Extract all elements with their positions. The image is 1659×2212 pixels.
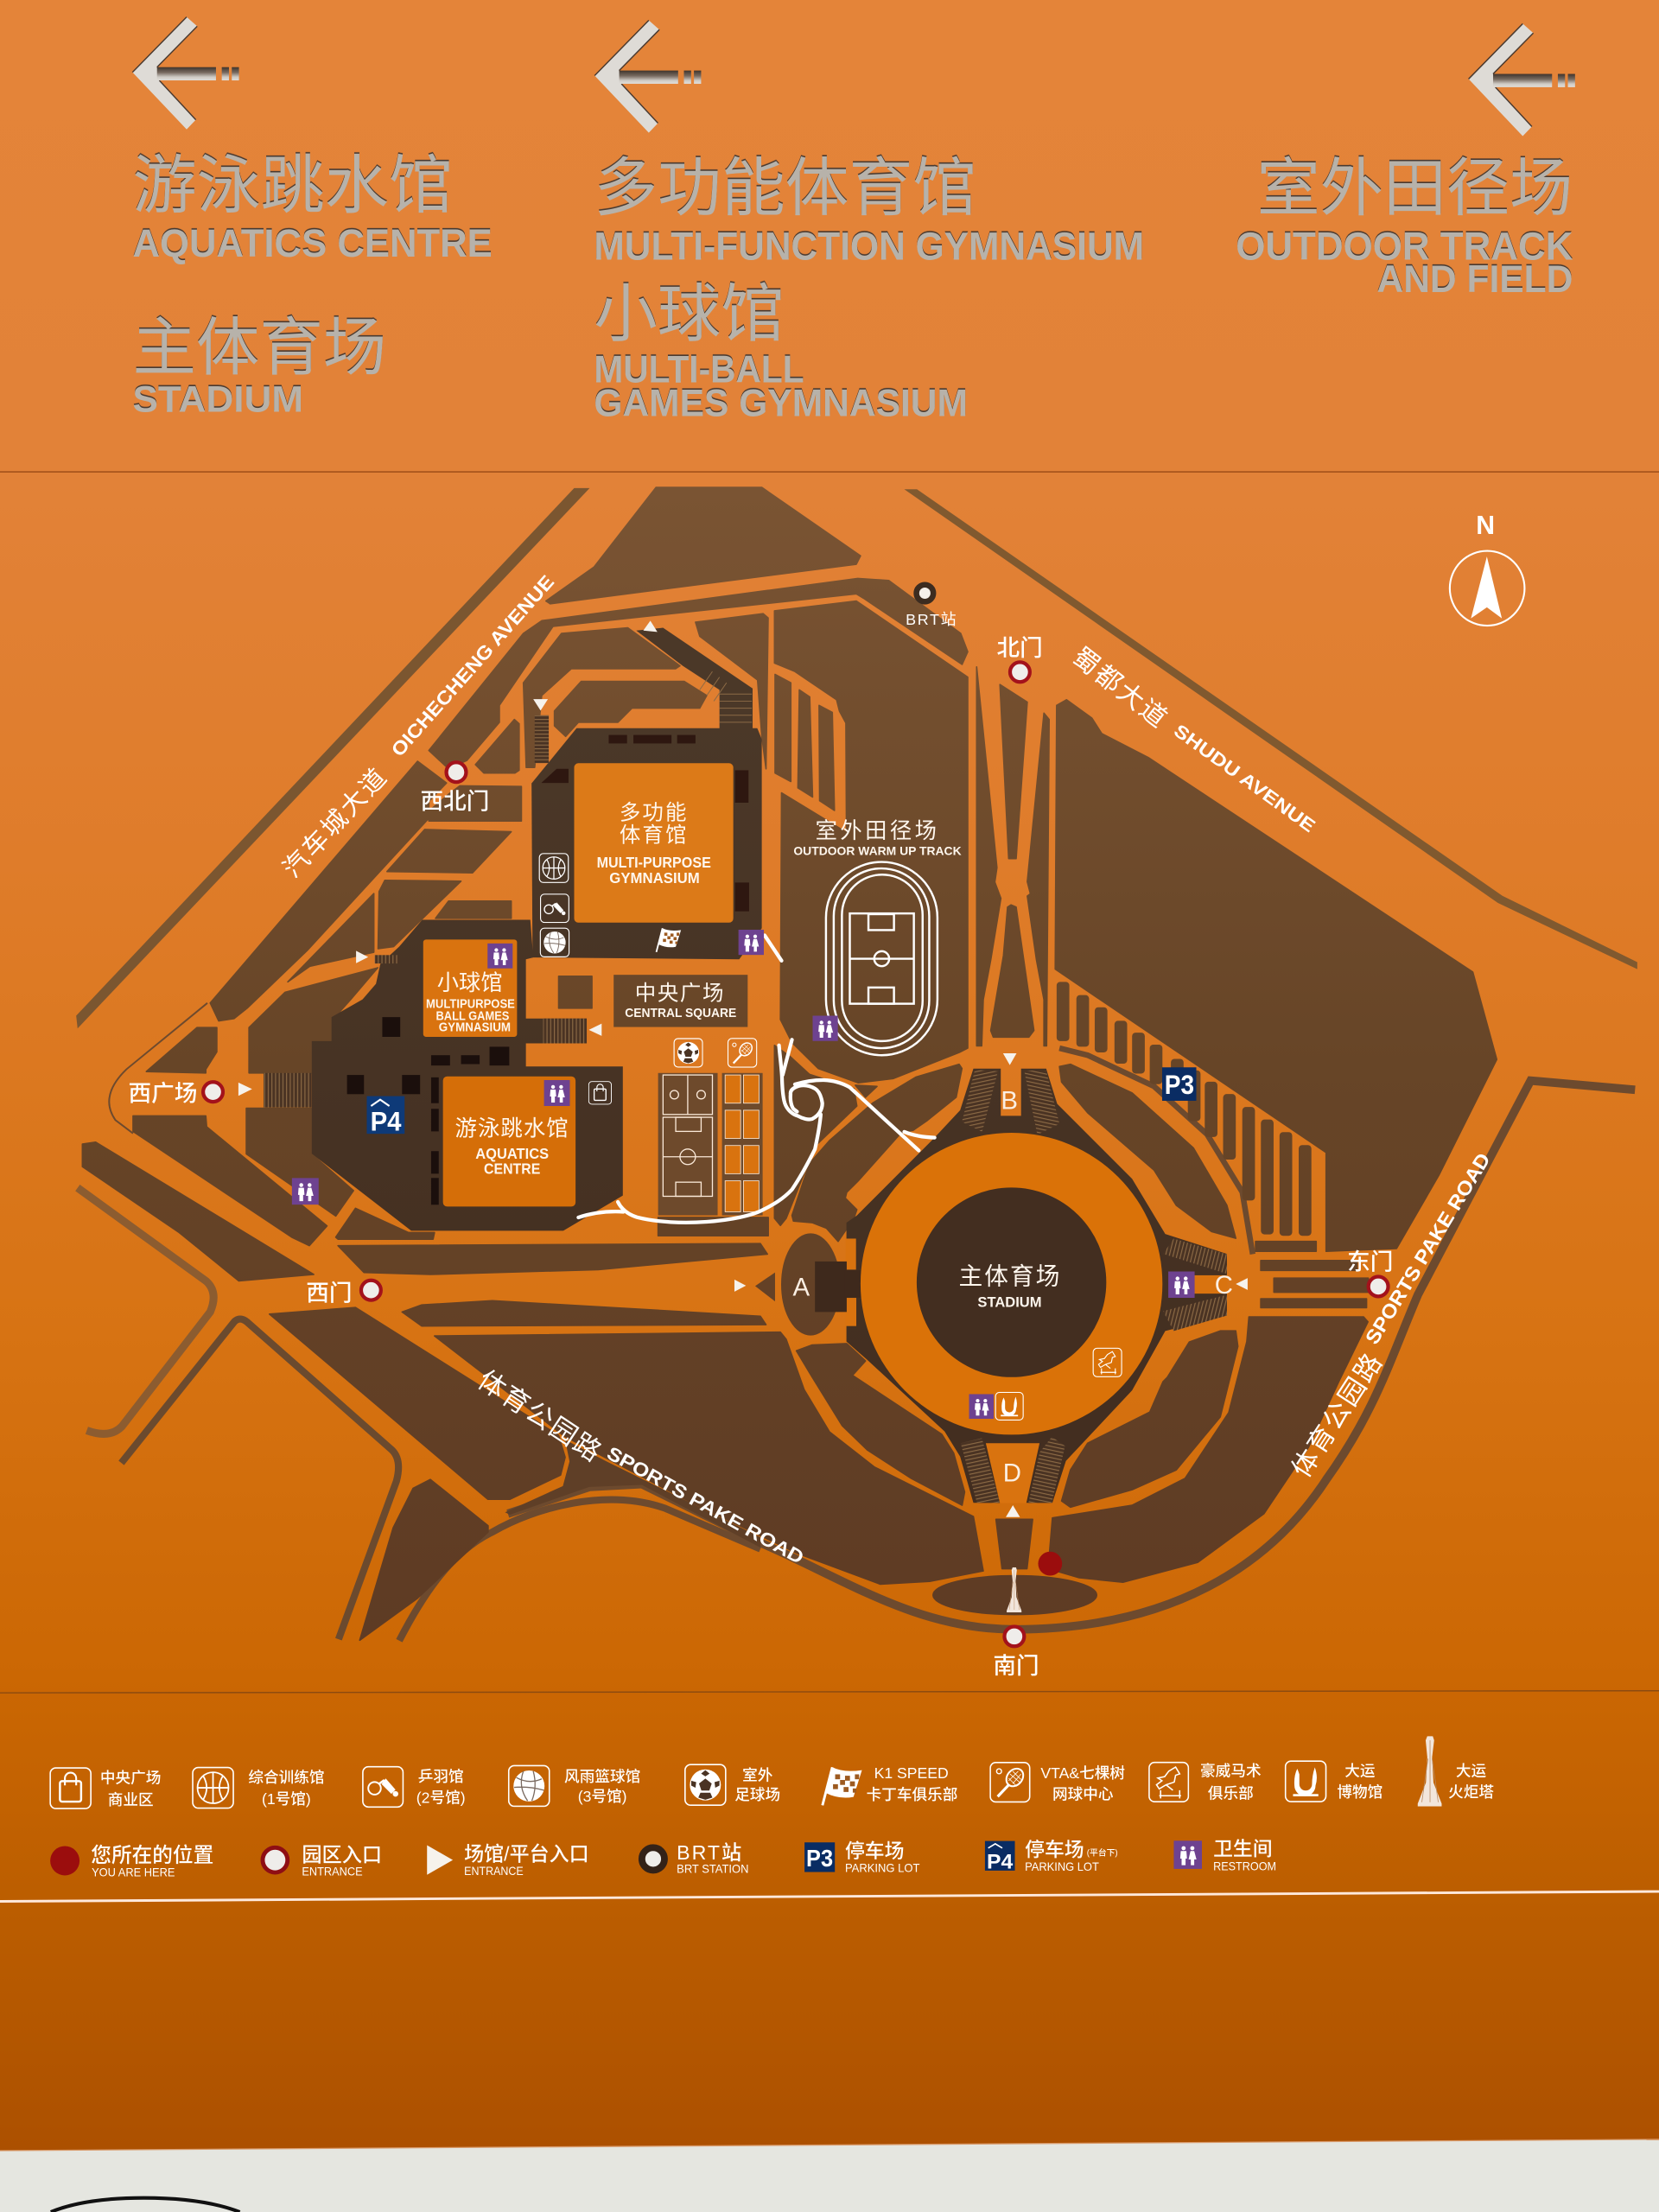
stadium gate letters: A xyxy=(793,1274,810,1302)
icon: shopping bag xyxy=(588,1082,612,1104)
entrance labels: 西广场 xyxy=(129,1080,197,1106)
legend: P3 parking: P3 xyxy=(806,1845,833,1872)
road label: Sports Park Road east en: SPORTS PAKE ROAD xyxy=(1361,1149,1495,1348)
legend: tennis centre: 网球中心 xyxy=(1052,1785,1114,1802)
legend: P4 parking xyxy=(985,1839,1118,1873)
entrance labels: 东门 xyxy=(1347,1249,1393,1274)
heading: stadium: STADIUM xyxy=(132,379,303,420)
label: multi-ball gymnasium: MULTIPURPOSE xyxy=(426,998,515,1012)
heading: aquatics centre: AQUATICS CENTRE xyxy=(132,221,493,265)
entrance labels: 南门 xyxy=(993,1653,1039,1679)
arrow: left to outdoor track xyxy=(1469,23,1575,137)
legend: outdoor soccer: 室外 xyxy=(742,1766,773,1783)
running track xyxy=(826,862,938,1055)
legend: all-weather basketball hall xyxy=(509,1765,640,1806)
label: multi-ball gymnasium: GYMNASIUM xyxy=(439,1020,511,1034)
icon: tennis xyxy=(728,1039,757,1067)
legend: park entrance: 园区入口 xyxy=(302,1843,382,1866)
panel: directional header xyxy=(132,17,1575,425)
heading: stadium: 主体育场 xyxy=(132,312,386,384)
building: multi-function gymnasium xyxy=(574,763,734,923)
heading: multi-function gymnasium: MULTI-FUNCTION GYMNASIUM xyxy=(594,224,1144,268)
arrow: left to aquatics and stadium xyxy=(132,17,239,130)
legend: all-weather basketball hall: 风雨篮球馆 xyxy=(564,1768,640,1785)
legend: P3 parking: 停车场 xyxy=(845,1840,905,1862)
legend: universiade torch tower: 大运 xyxy=(1456,1763,1487,1780)
aquatics and multi-ball building base xyxy=(264,919,623,1230)
legend: training hall xyxy=(193,1768,324,1808)
legend: equestrian club: 豪威马术 xyxy=(1200,1763,1262,1780)
road edge lines xyxy=(76,488,1637,1641)
icon: rain basketball hall xyxy=(540,928,569,957)
legend: P3 parking: PARKING LOT xyxy=(845,1861,920,1875)
legend: BRT station: BRT站 xyxy=(677,1841,743,1864)
icon: restroom multi-ball xyxy=(487,944,512,969)
ground blocks xyxy=(82,487,1497,1640)
entrance markers xyxy=(203,662,1389,1646)
road labels xyxy=(277,571,1495,1568)
legend: tennis centre xyxy=(990,1763,1125,1802)
legend: outdoor soccer: 足球场 xyxy=(734,1786,780,1803)
heading: outdoor track and field: AND FIELD xyxy=(1376,258,1573,301)
label: outdoor track: OUTDOOR WARM UP TRACK xyxy=(793,843,962,857)
label: multi-function gymnasium: 多功能 xyxy=(620,801,689,825)
legend: training hall: 综合训练馆 xyxy=(248,1769,324,1786)
icon: north compass: N xyxy=(1476,512,1495,540)
icon: restroom west xyxy=(292,1178,319,1205)
heading: aquatics centre: 游泳跳水馆 xyxy=(132,149,453,221)
icon: restroom track xyxy=(812,1016,838,1041)
label: BRT station: BRT站 xyxy=(906,611,957,628)
entrance labels: 西北门 xyxy=(421,788,489,814)
legend: universiade museum xyxy=(1286,1761,1382,1802)
legend: table tennis and badminton hall: (2号馆) xyxy=(416,1789,466,1807)
legend: P3 parking xyxy=(804,1840,920,1875)
label: central square: 中央广场 xyxy=(635,982,725,1006)
legend: you are here: YOU ARE HERE xyxy=(92,1865,175,1878)
icon: P4 parking: P4 xyxy=(371,1106,402,1137)
legend: universiade torch tower: 火炬塔 xyxy=(1448,1783,1494,1801)
stadium platform xyxy=(815,1069,1227,1503)
legend: universiade torch tower xyxy=(1418,1736,1494,1807)
label: stadium xyxy=(959,1263,1061,1310)
label: multi-function gymnasium: GYMNASIUM xyxy=(609,869,700,887)
icon: P3 parking: P3 xyxy=(1165,1070,1194,1100)
road label: Sports Park Road south en: SPORTS PAKE ROAD xyxy=(603,1442,807,1568)
entrance labels: 北门 xyxy=(996,635,1043,661)
heading: aquatics centre xyxy=(132,149,493,265)
icon: basketball hall xyxy=(539,854,569,882)
legend: equestrian club xyxy=(1149,1763,1262,1802)
building: multi-ball gymnasium xyxy=(423,939,517,1037)
road label: Qichecheng Avenue en: OICHECHENG AVENUE xyxy=(387,571,558,760)
icon: restroom east stadium xyxy=(1168,1272,1195,1298)
stadium gate letters: D xyxy=(1003,1459,1021,1487)
heading: multi-ball games gymnasium: 小球馆 xyxy=(594,278,785,350)
legend: training hall: (1号馆) xyxy=(262,1790,311,1808)
legend: karting club xyxy=(823,1764,957,1805)
stadium gate letters: B xyxy=(1001,1087,1018,1116)
road label: Sports Park Road south cn: 体育公园路 xyxy=(473,1364,608,1468)
label: aquatics centre: 游泳跳水馆 xyxy=(455,1116,569,1141)
label: outdoor track: 室外田径场 xyxy=(816,819,939,843)
legend: shopping area: 商业区 xyxy=(108,1791,154,1808)
legend: you are here: 您所在的位置 xyxy=(91,1844,213,1867)
icon: torch tower xyxy=(1007,1567,1021,1612)
legend: park entrance xyxy=(263,1843,382,1878)
heading: multi-ball games gymnasium xyxy=(594,278,968,425)
label: central square xyxy=(625,982,737,1020)
entrance labels: 西门 xyxy=(306,1280,353,1306)
legend: table tennis and badminton hall xyxy=(363,1767,466,1807)
icon: restroom gym xyxy=(739,930,764,955)
gymnasium building base xyxy=(531,628,762,959)
icon: restroom south stadium xyxy=(969,1394,994,1419)
heading: outdoor track and field: OUTDOOR TRACK xyxy=(1236,224,1573,268)
icon: universiade museum xyxy=(995,1392,1023,1420)
icon: P4 parking xyxy=(366,1096,404,1137)
road label: Shudu Avenue cn: 蜀都大道 xyxy=(1067,642,1174,734)
heading: multi-ball games gymnasium: MULTI-BALL xyxy=(594,348,804,391)
label: aquatics centre: AQUATICS xyxy=(475,1145,549,1162)
building labels xyxy=(426,801,1233,1487)
icon: karting flag xyxy=(657,928,681,952)
label: aquatics centre: CENTRE xyxy=(484,1160,541,1177)
heading: multi-function gymnasium xyxy=(594,152,1144,268)
legend: equestrian club: 俱乐部 xyxy=(1208,1785,1254,1802)
legend: universiade museum: 博物馆 xyxy=(1337,1783,1382,1801)
label: multi-function gymnasium xyxy=(597,801,711,887)
road label: Qichecheng Avenue cn: 汽车城大道 xyxy=(277,761,394,883)
legend: restroom xyxy=(1173,1838,1276,1872)
heading: outdoor track and field: 室外田径场 xyxy=(1257,154,1573,224)
legend: restroom: RESTROOM xyxy=(1213,1859,1276,1872)
label: multi-ball gymnasium: BALL GAMES xyxy=(435,1009,510,1023)
road label: Shudu Avenue en: SHUDU AVENUE xyxy=(1170,721,1319,836)
label: aquatics centre xyxy=(455,1116,569,1177)
white paths xyxy=(578,935,935,1223)
entrance labels xyxy=(129,635,1393,1679)
label: outdoor track xyxy=(793,819,962,857)
central square block xyxy=(613,975,747,1027)
heading: multi-function gymnasium: 多功能体育馆 xyxy=(594,152,976,224)
heading: outdoor track and field xyxy=(1236,154,1573,301)
parking lot P3 stalls xyxy=(1057,982,1312,1236)
label: central square: CENTRAL SQUARE xyxy=(625,1007,737,1020)
entrance triangles xyxy=(238,620,1248,1517)
icon: north compass xyxy=(1450,512,1524,626)
legend: tennis centre: VTA&七棵树 xyxy=(1040,1764,1125,1782)
you are here marker xyxy=(1038,1552,1062,1576)
legend: P4 parking: (平台下) xyxy=(1087,1847,1118,1859)
stadium gate letters xyxy=(793,1087,1233,1487)
icon: soccer xyxy=(674,1039,702,1067)
legend: park entrance: ENTRANCE xyxy=(302,1865,363,1878)
arrow: left to gymnasium xyxy=(594,21,701,133)
heading: stadium xyxy=(132,312,386,420)
label: stadium: STADIUM xyxy=(977,1294,1042,1310)
sports fields xyxy=(658,1073,763,1216)
label: stadium: 主体育场 xyxy=(959,1263,1061,1290)
BRT station marker xyxy=(917,585,933,601)
icon: equestrian xyxy=(1093,1348,1122,1376)
panel: site map xyxy=(76,487,1637,1679)
label: multi-ball gymnasium xyxy=(426,971,515,1034)
legend: BRT station: BRT STATION xyxy=(677,1861,748,1875)
wall below the sign xyxy=(0,2139,1659,2212)
legend: shopping area xyxy=(50,1768,161,1808)
legend: karting club: K1 SPEED xyxy=(874,1764,949,1782)
legend: BRT station xyxy=(642,1841,748,1875)
label: multi-ball gymnasium: 小球馆 xyxy=(437,971,503,995)
legend: venue entrance: 场馆/平台入口 xyxy=(464,1842,589,1865)
legend: table tennis and badminton hall: 乒羽馆 xyxy=(418,1768,464,1785)
panel: legend xyxy=(50,1736,1494,1878)
legend: outdoor soccer xyxy=(685,1764,780,1805)
legend: P4 parking: P4 xyxy=(987,1850,1014,1873)
legend: venue entrance: ENTRANCE xyxy=(464,1864,524,1878)
heading: multi-ball games gymnasium: GAMES GYMNASIUM xyxy=(594,383,968,425)
legend: universiade museum: 大运 xyxy=(1344,1763,1376,1780)
road label: Sports Park Road east cn: 体育公园路 xyxy=(1286,1347,1389,1483)
legend: karting club: 卡丁车俱乐部 xyxy=(867,1786,957,1803)
legend: venue entrance xyxy=(427,1842,589,1878)
stadium gate letters: C xyxy=(1215,1271,1233,1300)
map icons xyxy=(292,854,1196,1612)
icon: badminton hall xyxy=(541,894,569,923)
icon: restroom aquatics xyxy=(544,1080,570,1106)
legend: you are here xyxy=(50,1844,213,1878)
label: multi-function gymnasium: MULTI-PURPOSE xyxy=(597,854,711,871)
legend: P4 parking: 停车场 xyxy=(1025,1839,1084,1861)
legend: shopping area: 中央广场 xyxy=(100,1770,161,1787)
legend: all-weather basketball hall: (3号馆) xyxy=(578,1788,627,1805)
building: aquatics centre xyxy=(443,1077,575,1206)
legend: restroom: 卫生间 xyxy=(1213,1838,1273,1860)
legend: P4 parking: PARKING LOT xyxy=(1025,1859,1099,1873)
label: multi-function gymnasium: 体育馆 xyxy=(620,823,689,848)
